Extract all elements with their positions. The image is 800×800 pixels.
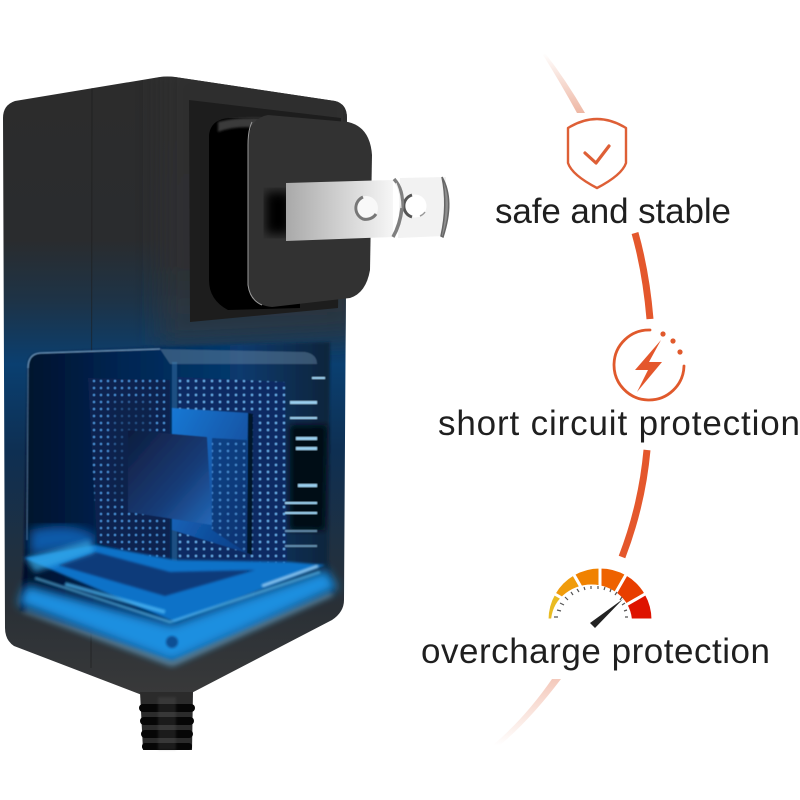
connector arc: upper xyxy=(635,233,650,319)
connector arc: lower xyxy=(622,450,647,557)
label: safe and stable: safe and stable xyxy=(495,192,731,231)
label: short circuit protection: short circuit protection xyxy=(438,404,800,443)
metal prongs xyxy=(286,177,449,241)
glowing floor xyxy=(18,540,338,664)
connector arc: bottom fade xyxy=(492,679,561,746)
power cord xyxy=(139,692,195,750)
circuit boards xyxy=(88,362,287,600)
side connector stripes xyxy=(285,377,325,547)
adapter body xyxy=(3,60,449,702)
connector arc: top fade xyxy=(543,53,585,113)
circuit window xyxy=(18,342,338,664)
icon: lightning in circle xyxy=(614,330,684,400)
icon: shield check xyxy=(568,119,626,188)
socket recess and plug xyxy=(189,100,449,322)
icon: speed gauge xyxy=(547,567,653,630)
label: overcharge protection: overcharge protection xyxy=(421,632,770,671)
